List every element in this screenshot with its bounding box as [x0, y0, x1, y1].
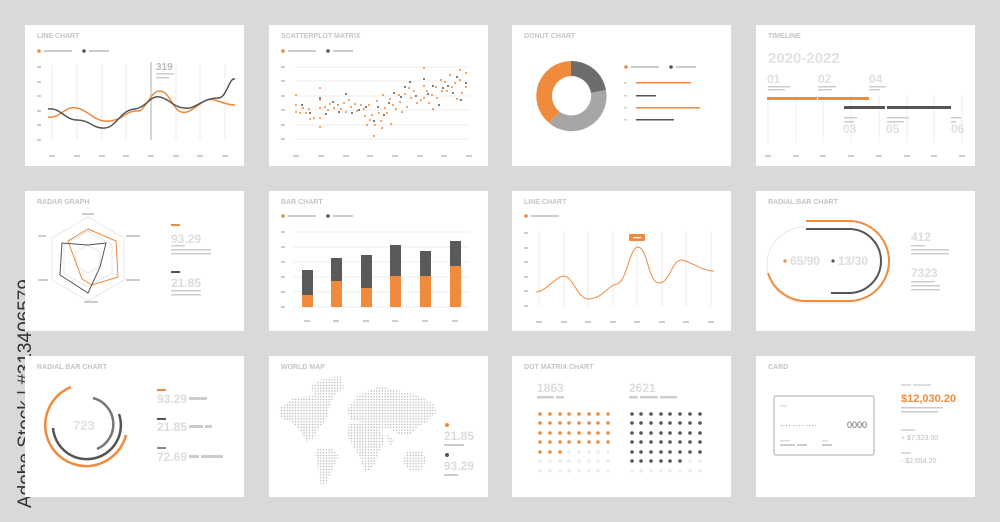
chart [281, 66, 472, 157]
panel: line chart [25, 25, 244, 166]
panel: radial bar chart (stadium) [756, 191, 975, 331]
title: LINE CHART [524, 199, 567, 206]
panel: radar graph [25, 191, 244, 331]
panel: donut chart [512, 25, 731, 166]
chart [524, 231, 714, 323]
donut [536, 61, 607, 131]
title: TIMELINE [768, 33, 801, 40]
title: LINE CHART [37, 33, 80, 40]
panel: radial bar chart (circular) [25, 356, 244, 497]
timeline chart: 02 [818, 72, 832, 86]
legend [281, 49, 353, 53]
stats: 21.85 [171, 276, 201, 290]
stats: 21.85 [157, 420, 187, 434]
balance [901, 384, 956, 465]
legend [281, 214, 353, 218]
title: SCATTERPLOT MATRIX [281, 33, 361, 40]
stadium bars [767, 221, 889, 303]
balance: $12,030.20 [901, 393, 956, 405]
watermark id text: Adobe Stock | #313406579 [15, 279, 36, 508]
orange dots [538, 412, 610, 473]
stats [911, 230, 949, 290]
title: RADAR GRAPH [37, 199, 90, 206]
panel: line chart 2 [512, 191, 731, 331]
stats: 7323 [911, 266, 938, 280]
values: 13/30 [838, 254, 868, 268]
stats: 93.29 [171, 232, 201, 246]
values: 65/90 [790, 254, 820, 268]
legend [444, 423, 474, 476]
balance: + $7,323.00 [901, 435, 938, 442]
credit card: 0000 [847, 420, 867, 430]
stats [157, 389, 223, 464]
headings [537, 381, 677, 398]
panel: card [756, 356, 975, 497]
title: RADIAL BAR CHART [768, 199, 839, 206]
stats: 412 [911, 230, 931, 244]
panel: bar chart [269, 191, 488, 331]
dark dots [630, 412, 702, 473]
title: CARD [768, 364, 788, 371]
radar [38, 213, 140, 303]
bars [281, 231, 469, 322]
credit card [774, 396, 874, 455]
legend [37, 49, 109, 53]
timeline chart: 06 [951, 122, 965, 136]
legend [524, 214, 559, 218]
chart [37, 62, 235, 157]
timeline chart: 03 [843, 122, 857, 136]
legend and bars [624, 65, 700, 120]
map [279, 376, 437, 486]
year heading: 2020-2022 [768, 50, 840, 67]
panel: scatterplot matrix [269, 25, 488, 166]
title: WORLD MAP [281, 364, 325, 371]
timeline chart: 05 [886, 122, 900, 136]
stats: 93.29 [157, 392, 187, 406]
title: DONUT CHART [524, 33, 576, 40]
panel: timeline [756, 25, 975, 166]
panel: dot matrix chart [512, 356, 731, 497]
panel: world map [269, 356, 488, 497]
balance: - $2,654.20 [901, 458, 937, 465]
callout 319 [156, 62, 174, 78]
legend: 21.85 [444, 429, 474, 443]
title: RADIAL BAR CHART [37, 364, 108, 371]
headings: 1863 [537, 381, 564, 395]
title: BAR CHART [281, 199, 323, 206]
legend: 93.29 [444, 459, 474, 473]
values [783, 254, 868, 268]
stats: 72.69 [157, 450, 187, 464]
callout tag [629, 234, 645, 241]
radial bars [45, 387, 126, 466]
timeline chart: 01 [767, 72, 781, 86]
title: DOT MATRIX CHART [524, 364, 594, 371]
timeline chart: 04 [869, 72, 883, 86]
headings: 2621 [629, 381, 656, 395]
credit card: ···· ···· ···· [780, 421, 816, 430]
radial bars: 723 [73, 418, 95, 433]
callout 319: 319 [156, 62, 173, 73]
timeline chart [765, 72, 965, 157]
stats [171, 224, 211, 296]
